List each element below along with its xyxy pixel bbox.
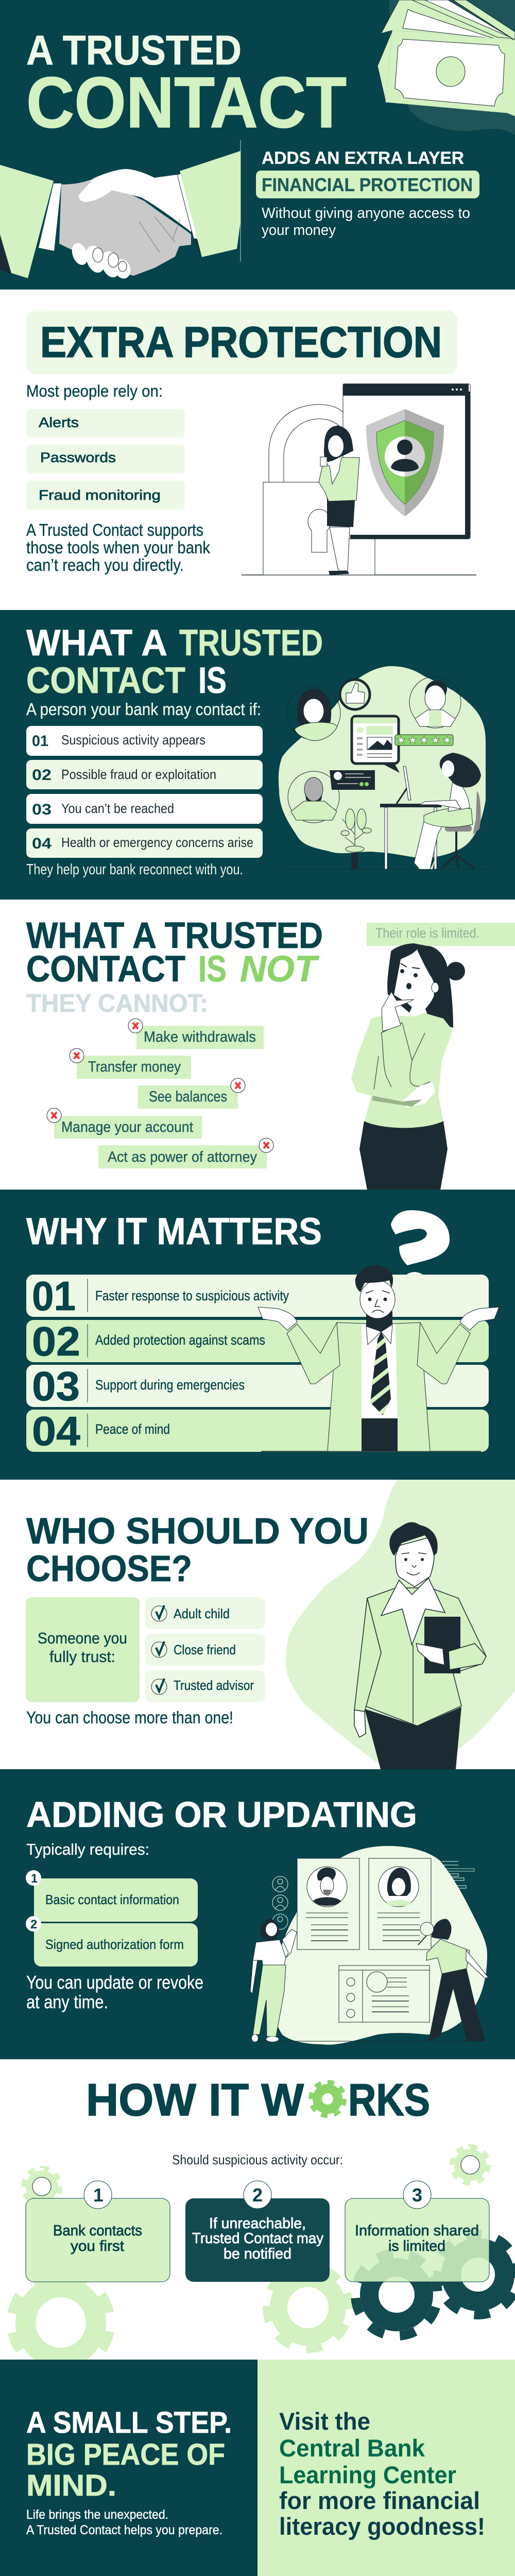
contact: woman bbox=[287, 686, 340, 741]
panel: visit the learning center: for more financial bbox=[279, 2487, 480, 2514]
step 2 card: Trusted Contact may bbox=[192, 2230, 323, 2247]
profile card: man bbox=[297, 1858, 359, 1950]
option: trusted advisor: Trusted advisor bbox=[174, 1677, 254, 1693]
tag: act as power of attorney bbox=[98, 1138, 273, 1168]
tag: make withdrawals bbox=[128, 1019, 264, 1049]
plant bbox=[341, 809, 371, 869]
tablet with review bbox=[352, 716, 453, 773]
tag: transfer money bbox=[70, 1048, 191, 1079]
option: adult child: Adult child bbox=[174, 1606, 230, 1621]
title: a trusted contact: CONTACT bbox=[26, 62, 347, 143]
step 2 card bbox=[185, 2181, 330, 2282]
row 01 bbox=[26, 726, 263, 756]
illustration: money bbox=[377, 0, 515, 135]
illustration: handshake bbox=[0, 151, 241, 281]
row 01 bbox=[26, 1273, 489, 1319]
step 3 card bbox=[345, 2181, 489, 2282]
row 04: Peace of mind bbox=[95, 1421, 170, 1437]
item: fraud monitoring bbox=[26, 481, 185, 510]
requirement 2: 2 bbox=[30, 1918, 37, 1931]
item: alerts bbox=[26, 409, 185, 437]
panel: visit the learning center: Learning Center bbox=[279, 2461, 456, 2488]
requirement 2 bbox=[26, 1916, 198, 1967]
tag: transfer money: Transfer money bbox=[88, 1059, 181, 1075]
row 01: Suspicious activity appears bbox=[61, 732, 205, 748]
intro text: Should suspicious activity occur: bbox=[172, 2152, 343, 2167]
closing text bbox=[26, 1972, 203, 2012]
floating lines bbox=[442, 1861, 474, 1888]
box: someone you fully trust: fully trust: bbox=[49, 1648, 115, 1666]
man with magnifier bbox=[418, 1919, 488, 2041]
row 03 bbox=[26, 794, 263, 824]
item: passwords bbox=[26, 445, 185, 473]
background blob bbox=[286, 1480, 515, 1767]
heading: WHAT A TRUSTED bbox=[26, 916, 323, 956]
row 04: 04 bbox=[32, 835, 52, 852]
item: alerts: Alerts bbox=[39, 415, 79, 430]
tag: manage your account bbox=[47, 1108, 202, 1139]
heading: NOT bbox=[240, 949, 320, 990]
heading: RKS bbox=[348, 2074, 430, 2125]
text: a trusted contact supports: A Trusted Contact supports bbox=[26, 520, 203, 539]
row 04 bbox=[26, 828, 263, 858]
requirement 1: 1 bbox=[31, 1872, 38, 1886]
heading: ADDING OR UPDATING bbox=[26, 1794, 417, 1835]
subtitle block: your money bbox=[262, 222, 336, 239]
requirement 2: Signed authorization form bbox=[45, 1937, 184, 1952]
tag: make withdrawals: Make withdrawals bbox=[144, 1029, 256, 1045]
subtitle block: ADDS AN EXTRA LAYER bbox=[262, 148, 464, 168]
tag: see balances: See balances bbox=[149, 1089, 227, 1105]
row 03: You can’t be reached bbox=[61, 801, 174, 816]
step 2 card: be notified bbox=[224, 2246, 291, 2262]
row 03 bbox=[26, 1363, 489, 1409]
panel: visit the learning center: literacy goodness! bbox=[279, 2513, 485, 2540]
illustration: padlock, screen, shield and woman bbox=[242, 384, 476, 575]
heading: CHOOSE? bbox=[26, 1549, 192, 1589]
row 03: Support during emergencies bbox=[95, 1377, 245, 1393]
row 03: 03 bbox=[32, 801, 52, 818]
contact: man top right bbox=[409, 676, 461, 728]
icon: thumbs up bbox=[340, 680, 370, 709]
panel: visit the learning center: Visit the bbox=[279, 2408, 370, 2435]
item: fraud monitoring: Fraud monitoring bbox=[39, 487, 161, 503]
subheading: A person your bank may contact if: bbox=[26, 700, 261, 719]
pill: financial protection: FINANCIAL PROTECTION bbox=[262, 174, 473, 195]
panel: a small step: Life brings the unexpected. bbox=[26, 2507, 168, 2522]
requirement 1 bbox=[26, 1870, 198, 1922]
icon: gear O bbox=[311, 2082, 345, 2116]
heading bbox=[86, 2074, 430, 2125]
box: someone you fully trust: Someone you bbox=[38, 1629, 127, 1647]
panel: hero bbox=[0, 0, 515, 290]
heading: CONTACT bbox=[26, 660, 185, 701]
heading: TRUSTED bbox=[179, 623, 323, 664]
subheading: Typically requires: bbox=[26, 1840, 149, 1858]
panel: a small step: A Trusted Contact helps you prepare. bbox=[26, 2523, 222, 2537]
closing text: They help your bank reconnect with you. bbox=[26, 861, 243, 878]
closing text: at any time. bbox=[26, 1991, 108, 2012]
illustration: man with folder bbox=[354, 1522, 486, 1769]
woman pointing bbox=[250, 1919, 297, 2042]
heading pill: extra protection: EXTRA PROTECTION bbox=[40, 318, 442, 366]
profile window bbox=[339, 1965, 430, 2022]
row 01: 01 bbox=[32, 733, 48, 750]
illustration: profiles review bbox=[250, 1846, 488, 2045]
step 3 card: 3 bbox=[412, 2184, 422, 2206]
step 2 card: 2 bbox=[252, 2184, 263, 2206]
illustration: thinking woman bbox=[351, 943, 465, 1190]
text: a trusted contact supports: those tools when your bank bbox=[26, 538, 210, 557]
heading: WHO SHOULD YOU bbox=[26, 1511, 369, 1552]
panel: a small step bbox=[0, 2360, 258, 2576]
panel: who should you choose bbox=[26, 1480, 515, 1769]
step 3 card: is limited bbox=[388, 2238, 445, 2255]
option: close friend bbox=[145, 1634, 265, 1666]
heading: CONTACT bbox=[26, 949, 185, 990]
row 04: Health or emergency concerns arise bbox=[61, 835, 253, 850]
text: most people rely on: Most people rely on: bbox=[26, 382, 163, 400]
row 04: 04 bbox=[32, 1408, 81, 1454]
panel: adding or updating bbox=[0, 1769, 515, 2059]
panel: visit the learning center: Central Bank bbox=[279, 2434, 425, 2462]
title: a trusted contact bbox=[26, 27, 347, 143]
step 1 card: 1 bbox=[93, 2184, 104, 2206]
tag: see balances bbox=[138, 1078, 245, 1109]
panel: a small step: BIG PEACE OF bbox=[26, 2438, 225, 2471]
panel: a small step: MIND. bbox=[26, 2469, 116, 2502]
subtitle block bbox=[256, 148, 479, 239]
title: a trusted contact: A TRUSTED bbox=[26, 27, 242, 74]
panel: why it matters bbox=[0, 1190, 515, 1480]
option: adult child bbox=[145, 1597, 265, 1629]
box: someone you fully trust bbox=[26, 1597, 140, 1702]
closing text: You can update or revoke bbox=[26, 1972, 203, 1993]
row 02: 02 bbox=[32, 1318, 80, 1364]
heading bbox=[26, 623, 323, 701]
chat bubble bbox=[330, 770, 375, 790]
requirement 1: Basic contact information bbox=[45, 1892, 179, 1907]
option: close friend: Close friend bbox=[174, 1642, 236, 1657]
item: passwords: Passwords bbox=[40, 450, 116, 465]
text: a trusted contact supports: can’t reach you directly. bbox=[26, 555, 184, 574]
row 04 bbox=[26, 1408, 489, 1454]
heading: WHY IT MATTERS bbox=[26, 1211, 322, 1252]
row 01: 01 bbox=[32, 1273, 76, 1319]
step 3 card: Information shared bbox=[355, 2223, 479, 2239]
icon: question mark bbox=[391, 1210, 450, 1298]
text: a trusted contact supports bbox=[26, 520, 210, 574]
option: trusted advisor bbox=[145, 1670, 265, 1702]
gears: decorative group bbox=[3, 2221, 515, 2381]
heading: IS bbox=[198, 660, 227, 701]
row 02 bbox=[26, 1318, 489, 1364]
heading: IS bbox=[198, 949, 227, 990]
heading: HOW IT W bbox=[86, 2074, 304, 2125]
row 02: 02 bbox=[32, 767, 52, 784]
row 02: Possible fraud or exploitation bbox=[61, 767, 216, 782]
icon: small gear left bbox=[24, 2168, 60, 2205]
icon: small gear right bbox=[452, 2146, 488, 2183]
closing text: You can choose more than one! bbox=[26, 1708, 233, 1727]
illustration: online contacts bbox=[279, 666, 489, 869]
panel: what a trusted contact is bbox=[0, 610, 515, 900]
tag: act as power of attorney: Act as power of attorney bbox=[108, 1149, 257, 1165]
step 1 card: you first bbox=[71, 2238, 124, 2255]
panel: what a trusted contact is not bbox=[26, 916, 515, 1190]
tag: their role is limited: Their role is limited. bbox=[375, 925, 479, 941]
row 02 bbox=[26, 760, 263, 789]
heading bbox=[26, 1511, 369, 1589]
user icons bbox=[272, 1876, 288, 1929]
heading: WHAT A bbox=[26, 623, 167, 664]
contact: man bottom left bbox=[288, 771, 339, 823]
step 1 card: Bank contacts bbox=[53, 2223, 142, 2239]
illustration: shrugging man bbox=[258, 1265, 499, 1451]
woman at desk bbox=[380, 753, 481, 869]
tablet with review: ★★★★★ bbox=[397, 735, 452, 746]
row 01: Faster response to suspicious activity bbox=[95, 1288, 289, 1303]
step 1 card bbox=[26, 2181, 170, 2282]
row 03: 03 bbox=[32, 1363, 80, 1409]
tag: manage your account: Manage your account bbox=[61, 1119, 193, 1136]
panel: how it works bbox=[3, 2074, 515, 2381]
panel: extra protection bbox=[26, 311, 476, 575]
panel: a small step: A SMALL STEP. bbox=[26, 2406, 232, 2439]
row 02: Added protection against scams bbox=[95, 1332, 265, 1348]
subheading: they cannot: THEY CANNOT: bbox=[26, 990, 208, 1018]
step 2 card: If unreachable, bbox=[209, 2215, 306, 2232]
profile card: woman bbox=[369, 1858, 431, 1950]
heading bbox=[26, 916, 323, 990]
panel: visit the learning center bbox=[258, 2360, 515, 2576]
tag: their role is limited bbox=[367, 923, 515, 946]
subtitle block: Without giving anyone access to bbox=[262, 205, 470, 222]
divider line bbox=[240, 140, 241, 262]
